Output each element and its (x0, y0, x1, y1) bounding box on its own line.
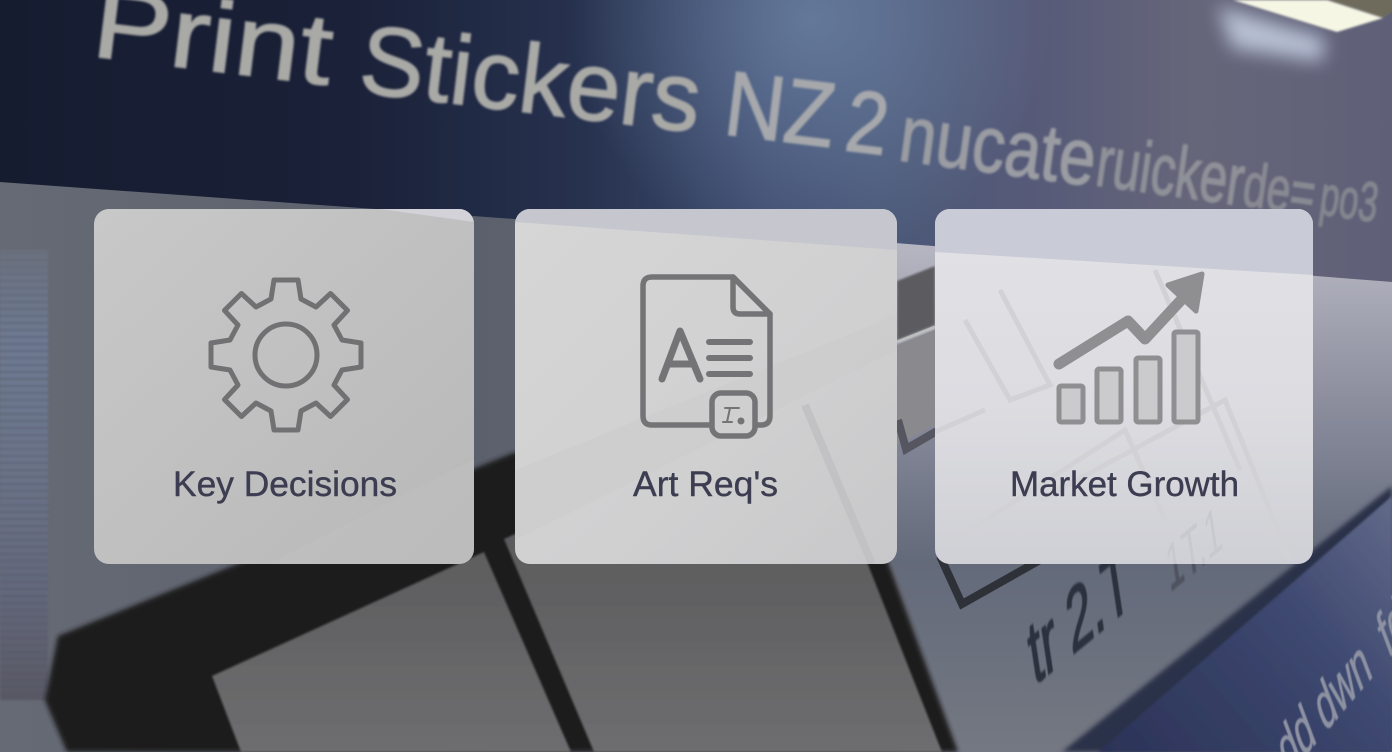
ceiling light glow (1218, 6, 1325, 62)
label: Art Req's (633, 465, 778, 504)
label: Key Decisions (173, 465, 397, 504)
label: Market Growth (1010, 465, 1239, 504)
panel: Art Req's (515, 209, 897, 564)
background: navy wall (0, 0, 1392, 300)
ceiling light (1233, 0, 1392, 32)
icon: gear (211, 280, 361, 430)
sheet text: 1T.1: 1T.1 (1162, 491, 1226, 605)
title on wall: NZ (720, 53, 841, 167)
panel: Key Decisions (94, 209, 474, 564)
sheet text: tr 2.T: tr 2.T (1023, 529, 1136, 705)
background: navy corner panel (1062, 486, 1392, 752)
card background (935, 209, 1313, 564)
title on wall (87, 0, 1383, 234)
title on wall: 2 (841, 71, 894, 174)
background: grid frame on light sheet (898, 420, 1040, 604)
card background: 1T.1 (1162, 491, 1226, 605)
title on wall: Stickers (355, 4, 707, 153)
title on wall: de= (1239, 151, 1320, 229)
card background (94, 209, 474, 564)
title on wall: ruicker (1092, 122, 1249, 221)
background: sticker sheet middle (504, 405, 942, 752)
background: dark sheet frame (45, 405, 958, 752)
background: grey display board (0, 182, 1392, 752)
title on wall: nucate (895, 89, 1102, 203)
background: light sheet area (780, 234, 1392, 752)
panel: Market Growth (935, 209, 1313, 564)
card background (515, 209, 897, 564)
background: sticker sheet left (212, 552, 571, 752)
background: window blinds (0, 250, 48, 700)
icon: document (643, 277, 770, 436)
background: dark block between cards (897, 266, 935, 445)
icon: growth chart (1059, 274, 1202, 422)
